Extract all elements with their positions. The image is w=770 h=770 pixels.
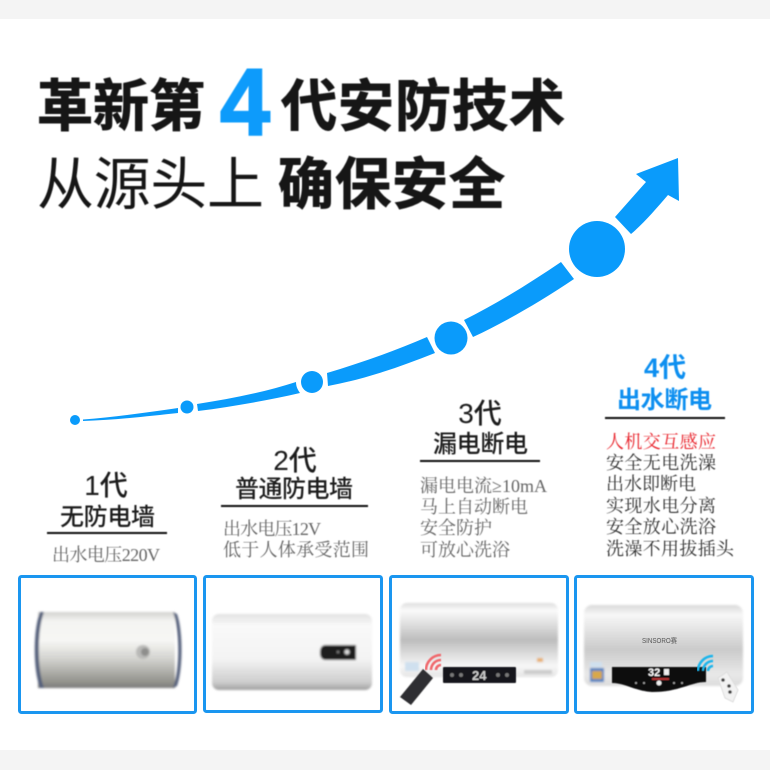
column 3 heading: 3代 — [458, 398, 502, 429]
column 2 heading — [221, 445, 368, 507]
rising arrow chart — [70, 158, 679, 425]
curve segment 2 — [197, 382, 300, 411]
column 4 description: 安全放心洗浴 — [606, 517, 716, 537]
icon: black remote — [400, 669, 433, 705]
column 4 description: 洗澡不用拔插头 — [606, 539, 735, 559]
node 3 — [301, 371, 323, 393]
column 1 description: 出水电压220V — [52, 545, 160, 565]
brand mark: SINSORO赛 — [642, 636, 677, 645]
column 1 heading — [47, 470, 167, 534]
column 4 heading — [605, 353, 725, 419]
column 2 description: 低于人体承受范围 — [223, 540, 369, 560]
panel: generation 1 heater — [20, 576, 196, 712]
heater 1 body — [35, 612, 182, 688]
column 2 description — [223, 519, 369, 560]
control display — [612, 667, 706, 692]
column 4 heading: 出水断电 — [617, 387, 712, 414]
panel: generation 3 heater — [390, 576, 568, 712]
title line 2: 确保安全 — [278, 153, 505, 216]
curve segment 1 — [83, 408, 178, 421]
panel display — [443, 667, 516, 683]
node 5 — [569, 221, 625, 277]
column 4 description: 出水即断电 — [606, 474, 696, 494]
icon: blue signal — [698, 656, 713, 671]
column 3 description — [420, 476, 547, 560]
node 1 — [70, 415, 80, 425]
control display: 32 — [648, 667, 660, 679]
column 3 heading: 漏电断电 — [433, 431, 528, 458]
column 3 heading — [420, 398, 540, 462]
column 1 heading: 1代 — [84, 470, 128, 501]
column 2 heading: 2代 — [273, 445, 317, 476]
heater 3 body — [400, 603, 558, 677]
column 4 description — [606, 432, 735, 559]
title line 1: 革新第 — [37, 75, 205, 138]
title line 2 — [37, 153, 505, 217]
title line 2: 从源头上 — [37, 153, 264, 217]
heater 4 body — [584, 605, 743, 686]
column 3 description: 马上自动断电 — [420, 497, 528, 517]
column 3 description: 漏电电流≥10mA — [420, 476, 547, 496]
column 1 heading: 无防电墙 — [60, 504, 155, 531]
column 4 description: 人机交互感应 — [606, 432, 716, 452]
arrow head — [615, 158, 679, 234]
top grey band — [0, 0, 770, 19]
column 3 description: 可放心洗浴 — [420, 540, 510, 560]
panel display: 24 — [472, 668, 487, 683]
column 4 description: 实现水电分离 — [606, 496, 716, 516]
title line 1 — [37, 50, 565, 156]
column 4 heading: 4代 — [644, 353, 686, 383]
column 2 heading: 普通防电墙 — [235, 476, 353, 503]
title line 1: 4 — [220, 50, 270, 156]
column 3 description: 安全防护 — [420, 518, 492, 538]
node 2 — [180, 400, 194, 414]
column 2 description: 出水电压12V — [223, 519, 321, 539]
curve segment 3 — [327, 337, 435, 386]
icon: red signal — [426, 655, 441, 670]
node 4 — [434, 322, 468, 354]
panel: generation 2 heater — [204, 576, 382, 712]
heater 2 body — [212, 614, 372, 690]
panel: generation 4 heater — [576, 576, 752, 712]
column 4 description: 安全无电洗澡 — [606, 453, 716, 473]
curve segment 4 — [464, 262, 574, 337]
icon: white remote — [718, 672, 738, 702]
bottom grey band — [0, 750, 770, 770]
title line 1: 代安防技术 — [281, 75, 565, 138]
